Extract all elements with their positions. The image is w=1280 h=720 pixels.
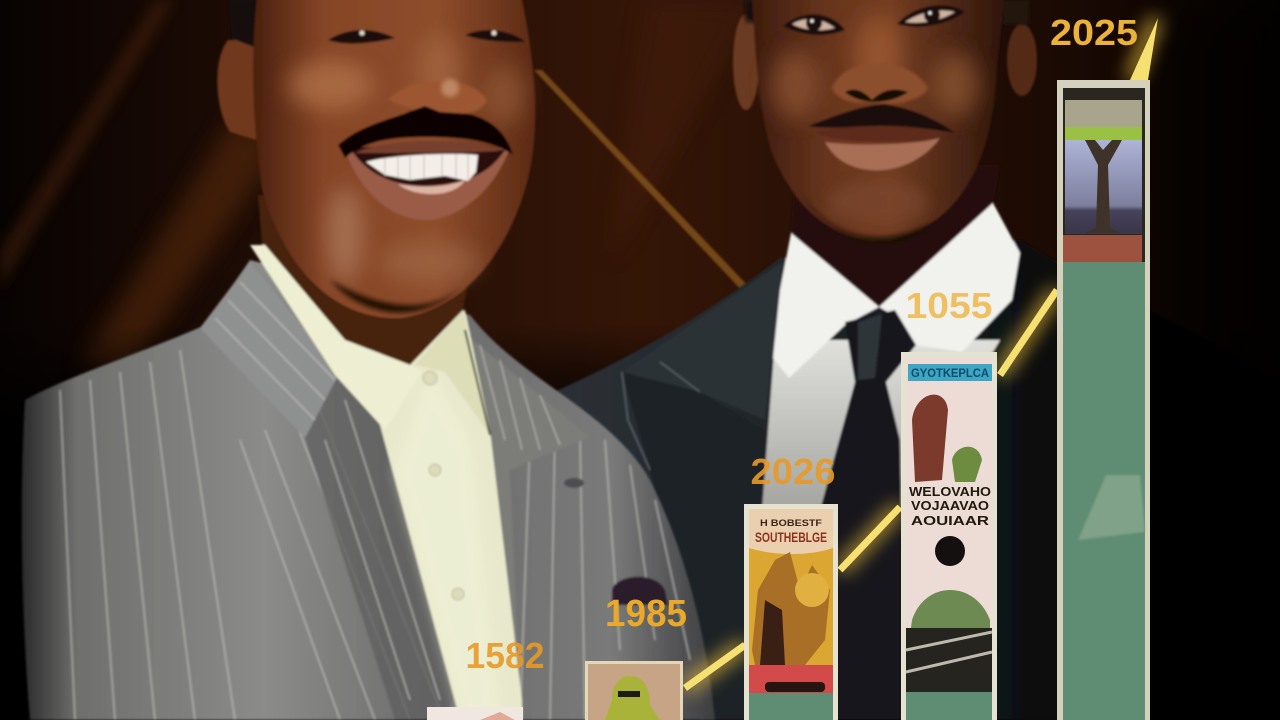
mustache: [808, 104, 955, 133]
pinstripes: [60, 350, 690, 720]
pocket square: [612, 577, 668, 605]
lapel hole: [564, 478, 584, 488]
bar: 2016: VOJAAVAO: [911, 498, 989, 513]
collar: [250, 245, 422, 430]
label: 2025: 2025: [1050, 12, 1138, 53]
lapel left: [200, 262, 340, 438]
ear: [217, 40, 256, 140]
suit right: [555, 240, 1280, 720]
lips: [815, 126, 945, 142]
bar: 1982: [427, 707, 523, 720]
tie: [820, 310, 916, 720]
person: right, older man in black suit: [555, 0, 1280, 720]
eyes: [328, 30, 395, 44]
teeth: [366, 154, 478, 181]
bar: 1985: [585, 661, 683, 720]
label: 2006: 2026: [750, 451, 836, 492]
ears: [733, 14, 759, 110]
eyes: [783, 14, 845, 35]
nose: [832, 63, 928, 104]
bar: 2016: [901, 352, 997, 720]
neck: [258, 195, 475, 365]
person: left, younger man in striped suit: [22, 0, 715, 720]
suit left: [22, 260, 715, 720]
label: 1985: 1985: [605, 593, 687, 635]
mouth: [350, 146, 505, 186]
mustache: [338, 106, 513, 158]
buttons: [423, 371, 437, 385]
lapel right: [622, 262, 782, 420]
hair: [745, 0, 757, 22]
nose: [388, 81, 487, 116]
bar: 2016: AOUIAAR: [911, 513, 990, 528]
collar: [773, 233, 879, 378]
bar: 2006: [744, 504, 838, 720]
face: [253, 0, 535, 318]
neck: [791, 165, 1000, 307]
face: [752, 0, 1005, 241]
lower lip: [345, 148, 510, 220]
hair: [228, 0, 275, 52]
label: 1982: 1582: [466, 635, 544, 676]
growth line: [685, 18, 1158, 688]
bar: 2016: GYOTKEPLCA: [911, 366, 989, 380]
shirt: [345, 310, 522, 720]
bar: 2006: SOUTHEBLGE: [755, 529, 827, 545]
bar: 2006: H BOBESTF: [760, 518, 823, 528]
bar: 2016: WELOVAHO: [909, 484, 991, 499]
shirt: [762, 340, 1000, 510]
bar: 2025: [1057, 80, 1150, 720]
upper lip: [355, 141, 500, 153]
label: 2016: 1055: [906, 285, 992, 326]
